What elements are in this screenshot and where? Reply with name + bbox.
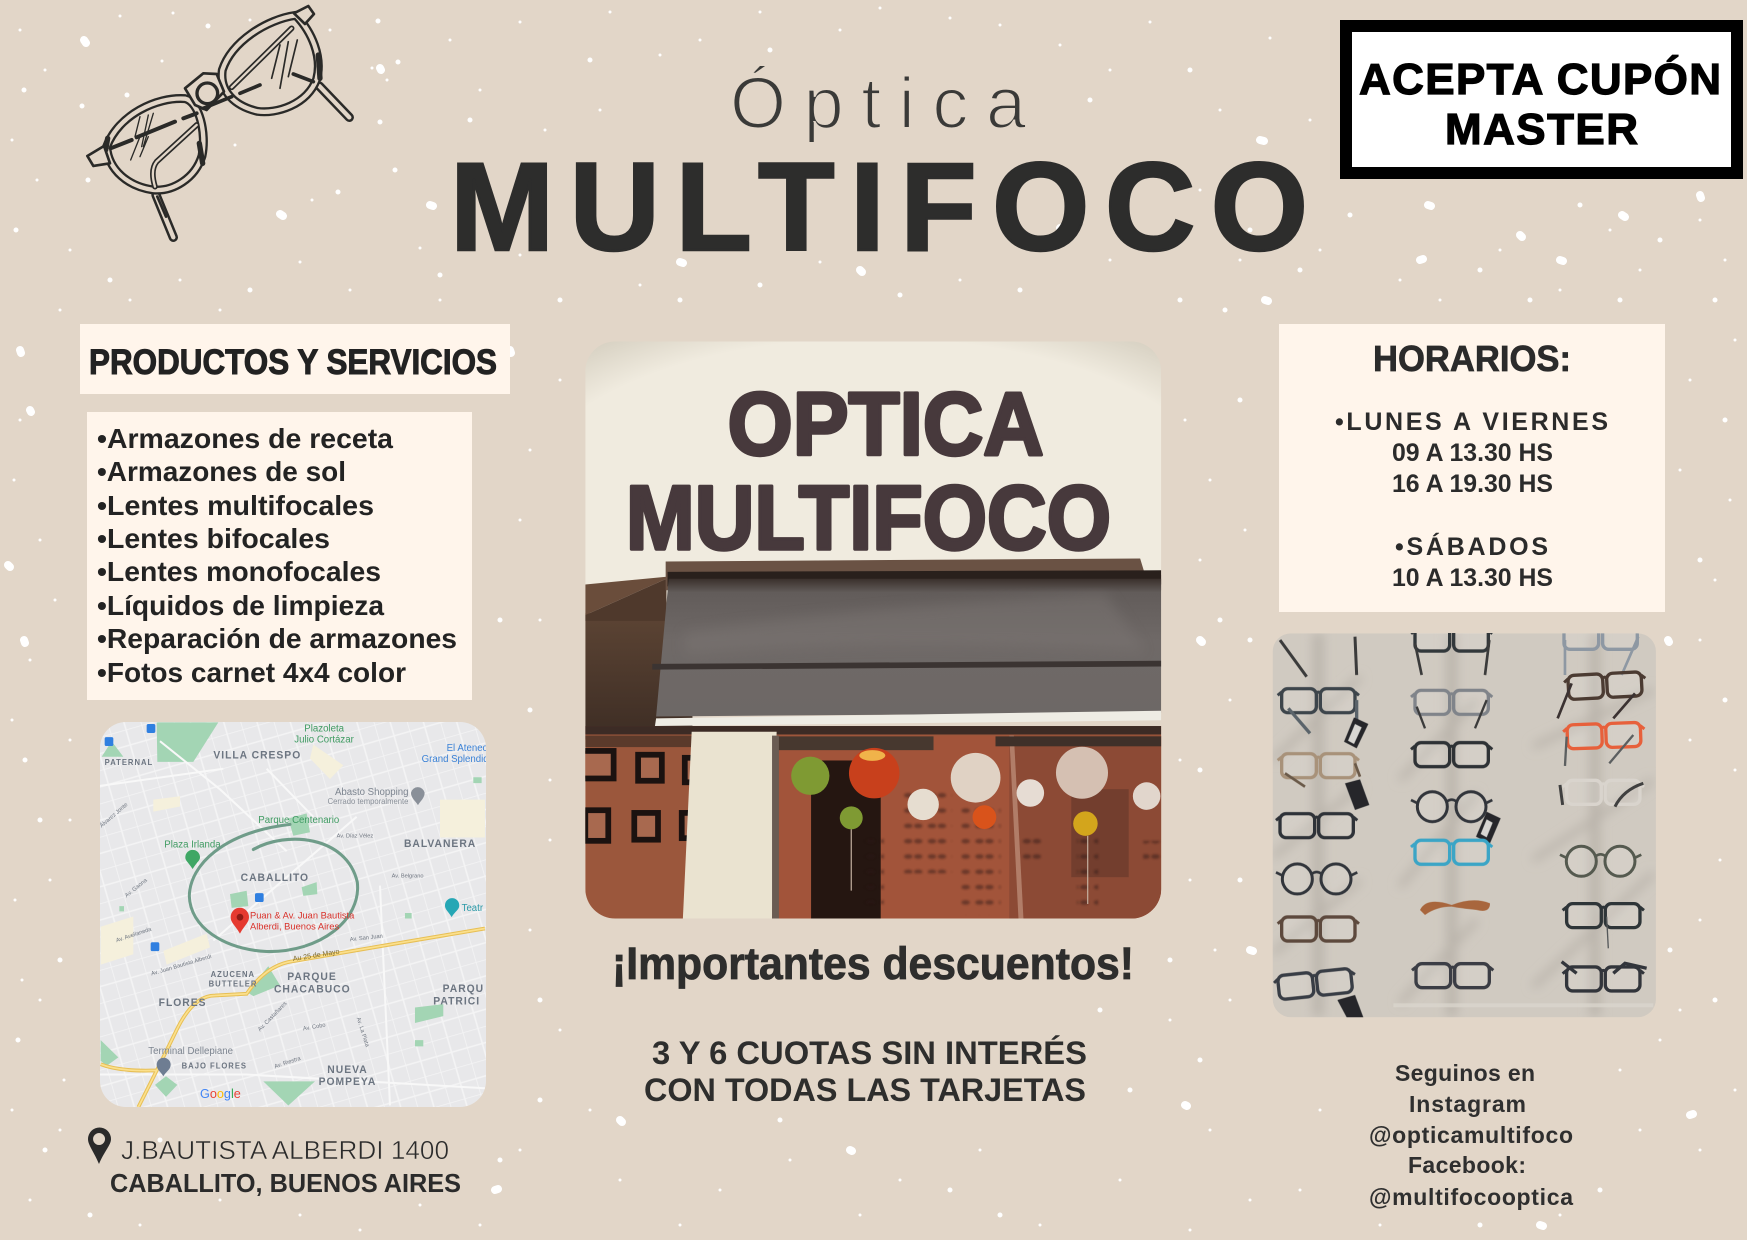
panel: horarios: 10 A 13.30 HS [1392, 564, 1553, 592]
map place labels: Terminal Dellepiane [148, 1046, 234, 1057]
window [772, 736, 1161, 919]
icon: location pin [88, 1128, 111, 1164]
panel: product list: •Armazones de sol [97, 456, 346, 487]
shop sign: OPTICA [728, 375, 1044, 474]
photo: eyeglass display rack [1273, 625, 1656, 1017]
map street labels: Av. Díaz Vélez [337, 833, 373, 839]
map street labels: Av. Castañares [257, 1001, 288, 1033]
map street labels: Av. La Plata [355, 1017, 370, 1049]
map major streets [100, 741, 485, 1105]
temple arm lower [156, 195, 173, 237]
map yellow tinted blocks [101, 745, 485, 965]
map street labels: Av. Gaona [124, 877, 149, 899]
picture frames [581, 751, 696, 841]
heading panel: productos y servicios [80, 324, 510, 394]
map red pin and label: Puan & Av. Juan Bautista [250, 910, 355, 922]
bridge [185, 73, 232, 110]
map place labels [148, 723, 489, 1057]
end pieces [87, 146, 110, 166]
map neighbourhood labels: BUTTELER [209, 979, 257, 989]
map street labels: Av. San Juan [350, 934, 383, 943]
panel: horarios: •SÁBADOS [1395, 532, 1548, 561]
map red pin and label [231, 908, 355, 934]
text: social media: @multifocooptica [1369, 1184, 1573, 1210]
map street labels: Av. Juan Bautista Alberdi [151, 954, 212, 978]
map street labels: Álvarez Jonte [98, 801, 129, 829]
map neighbourhood labels: BAJO FLORES [182, 1061, 247, 1070]
map POI markers [185, 850, 200, 869]
map neighbourhood labels: FLORES [159, 998, 207, 1009]
map neighbourhood labels: PARQUE [287, 972, 337, 983]
map street labels: Av. Cobo [303, 1022, 326, 1033]
text: social media: Seguinos en [1395, 1060, 1535, 1086]
map neighbourhood labels: PATERNAL [105, 758, 153, 767]
text: social media: Facebook: [1408, 1152, 1526, 1178]
shop sign: MULTIFOCO [626, 468, 1111, 569]
map street labels: Au 25 de Mayo [292, 948, 340, 963]
panel: product list: •Líquidos de limpieza [97, 590, 384, 621]
rack price tags [1337, 717, 1501, 1017]
rack frames column 2 [1411, 627, 1493, 988]
shop wall [585, 341, 1161, 609]
text: payment terms: 3 Y 6 CUOTAS SIN INTERÉS [652, 1035, 1087, 1071]
panel: horarios: 16 A 19.30 HS [1392, 470, 1553, 498]
map place labels: Grand Splendid [422, 754, 489, 765]
panel: horarios: 09 A 13.30 HS [1392, 439, 1553, 467]
left lens [106, 99, 203, 190]
map neighbourhood labels: AZUCENA [211, 970, 255, 979]
google logo: Google [200, 1086, 241, 1101]
heading panel: productos y servicios: PRODUCTOS Y SERVICIOS [89, 343, 497, 382]
map place labels: El Ateneo [447, 743, 488, 754]
rack frames column 1 [1273, 637, 1501, 1017]
map: Caballito location [98, 722, 489, 1107]
map street labels: Av. Riestra [274, 1056, 302, 1070]
panel: horarios [1279, 324, 1665, 612]
displayed eyeglasses [880, 792, 1160, 906]
map neighbourhood labels: PATRICI [433, 996, 480, 1007]
text: payment terms [644, 1035, 1087, 1108]
map street labels: Av. Avellaneda [115, 926, 153, 944]
map place labels: Plazoleta [304, 723, 345, 735]
text: payment terms: CON TODAS LAS TARJETAS [644, 1072, 1086, 1108]
right lens [222, 15, 320, 112]
map neighbourhood labels: CABALLITO [241, 873, 309, 884]
panel: horarios: HORARIOS: [1373, 338, 1571, 379]
panel: product list: •Lentes bifocales [97, 523, 330, 554]
map place labels: Cerrado temporalmente [328, 797, 408, 806]
awning [652, 558, 1161, 726]
map neighbourhood labels [105, 750, 484, 1088]
map parks [101, 722, 482, 1105]
map place labels: Plaza Irlanda [164, 840, 221, 851]
map location ring [189, 824, 358, 952]
panel: product list: •Reparación de armazones [97, 623, 457, 654]
rack frames column 3 [1558, 625, 1647, 991]
callout: acepta cupón master: MASTER [1445, 105, 1638, 154]
panel: product list: •Lentes multifocales [97, 490, 374, 521]
panel: product list: •Fotos carnet 4x4 color [97, 657, 406, 688]
map neighbourhood labels: CHACABUCO [274, 984, 351, 995]
address text [110, 1135, 461, 1198]
map highway [101, 928, 485, 1107]
callout: acepta cupón master: ACEPTA CUPÓN [1359, 54, 1721, 104]
title: MULTIFOCO: MULTIFOCO [450, 138, 1308, 277]
address text: CABALLITO, BUENOS AIRES [110, 1168, 461, 1198]
callout: acepta cupón master [1346, 26, 1737, 173]
text: social media: @opticamultifoco [1369, 1122, 1573, 1148]
icon: eyeglasses illustration [87, 6, 349, 237]
map street labels: Av. Belgrano [392, 873, 424, 879]
map neighbourhood labels: PARQU [443, 984, 484, 995]
title: Óptica: Óptica [730, 64, 1027, 144]
map neighbourhood labels: BALVANERA [404, 839, 476, 850]
map place labels: Teatr [462, 903, 484, 914]
rack bottom shelf [1393, 1003, 1653, 1007]
panel: product list: •Lentes monofocales [97, 556, 381, 587]
text: social media: Instagram [1409, 1091, 1526, 1117]
lanterns [791, 747, 1160, 904]
photo: shop front [581, 341, 1161, 921]
shop front lower wall [585, 726, 1161, 921]
map place labels: Parque Centenario [258, 815, 340, 826]
map neighbourhood labels: POMPEYA [319, 1077, 376, 1088]
pillar [683, 732, 777, 919]
shop sign [630, 390, 1110, 552]
map place labels: Julio Cortázar [294, 734, 355, 746]
map street labels [98, 801, 424, 1070]
rack wall [1273, 633, 1656, 1017]
panel: product list [87, 412, 472, 700]
panel: product list: •Armazones de receta [97, 423, 393, 454]
headline: importantes descuentos: ¡Importantes descuentos! [612, 938, 1134, 989]
rack shadows [1273, 633, 1653, 1017]
map neighbourhood labels: VILLA CRESPO [213, 750, 301, 761]
temple arm upper [319, 86, 349, 117]
map red pin and label: Alberdi, Buenos Aires [250, 921, 339, 933]
map place labels: Abasto Shopping [335, 787, 408, 798]
map neighbourhood labels: NUEVA [327, 1065, 368, 1076]
text: social media [1369, 1060, 1573, 1210]
address text: J.BAUTISTA ALBERDI 1400 [121, 1135, 449, 1165]
left shadowed wall [585, 577, 692, 739]
panel: horarios: •LUNES A VIERNES [1335, 408, 1608, 436]
